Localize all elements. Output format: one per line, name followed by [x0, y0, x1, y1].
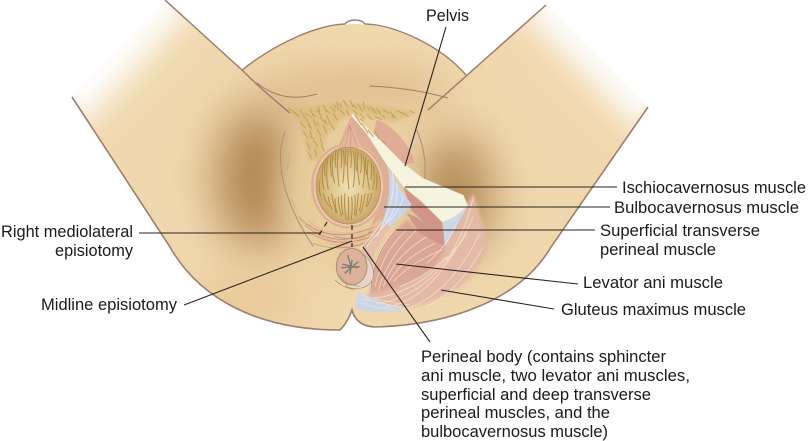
incision: midline episiotomy: [351, 225, 353, 247]
muscle fibre lines: [362, 197, 483, 310]
body: thighs and abdomen: [58, 0, 664, 330]
vaginal ring: [311, 143, 386, 228]
leader lines: [139, 27, 617, 342]
label: Midline episiotomy: Midline episiotomy: [41, 296, 178, 314]
label: Gluteus maximus muscle: Gluteus maximus muscle: [561, 301, 746, 319]
fascia: blue lower left: [355, 292, 410, 312]
label: Perineal body: bulbocavernosus muscle): [421, 423, 608, 441]
label: Right mediolateral episiotomy: [1, 223, 134, 260]
incision: right mediolateral episiotomy: [318, 222, 327, 237]
label: Levator ani muscle: Levator ani muscle: [583, 274, 723, 292]
label: Bulbocavernosus muscle: Bulbocavernosus muscle: [614, 199, 799, 217]
anus: [336, 248, 373, 289]
muscle: upper lobe: [373, 120, 415, 164]
label: Perineal body: Perineal body (contains sphincter: [421, 348, 666, 366]
perineal body band: [360, 222, 390, 277]
fascia: blue right strip: [442, 205, 468, 247]
muscle: gluteus maximus: [357, 193, 487, 310]
label: Right mediolateral episiotomy: Right mediolateral: [1, 223, 133, 241]
fetal head: [316, 147, 381, 224]
perineal skin folds: [298, 217, 375, 248]
label: Right mediolateral episiotomy: episiotomy: [55, 242, 134, 260]
label: Perineal body: superficial and deep transverse: [421, 386, 651, 404]
label: Superficial transverse perineal muscle: [600, 222, 760, 259]
label: Perineal body: perineal muscles, and the: [421, 404, 610, 422]
muscle: ischiocavernosus: [387, 165, 445, 247]
pelvis: pubic bone: [352, 113, 468, 223]
label: Superficial transverse perineal muscle: Superficial transverse: [600, 222, 760, 240]
muscle: levator ani: [370, 220, 445, 293]
labia outlines: [280, 130, 425, 247]
pubic hair: [288, 100, 417, 162]
fascia: blue central: [375, 165, 412, 241]
label: Ischiocavernosus muscle: Ischiocavernosus muscle: [622, 179, 806, 197]
label: Pelvis: Pelvis: [426, 7, 469, 25]
label: Perineal body: ani muscle, two levator ani muscles,: [421, 367, 690, 385]
label: Perineal body: [421, 348, 690, 441]
perineum skin: [305, 215, 382, 249]
muscle: pink band to apex: [338, 116, 390, 248]
label: Superficial transverse perineal muscle: perineal muscle: [600, 241, 716, 259]
clitoral hood: [337, 123, 362, 149]
anal margin folds: [335, 275, 360, 289]
illustration: perineal anatomy: [58, 0, 664, 330]
